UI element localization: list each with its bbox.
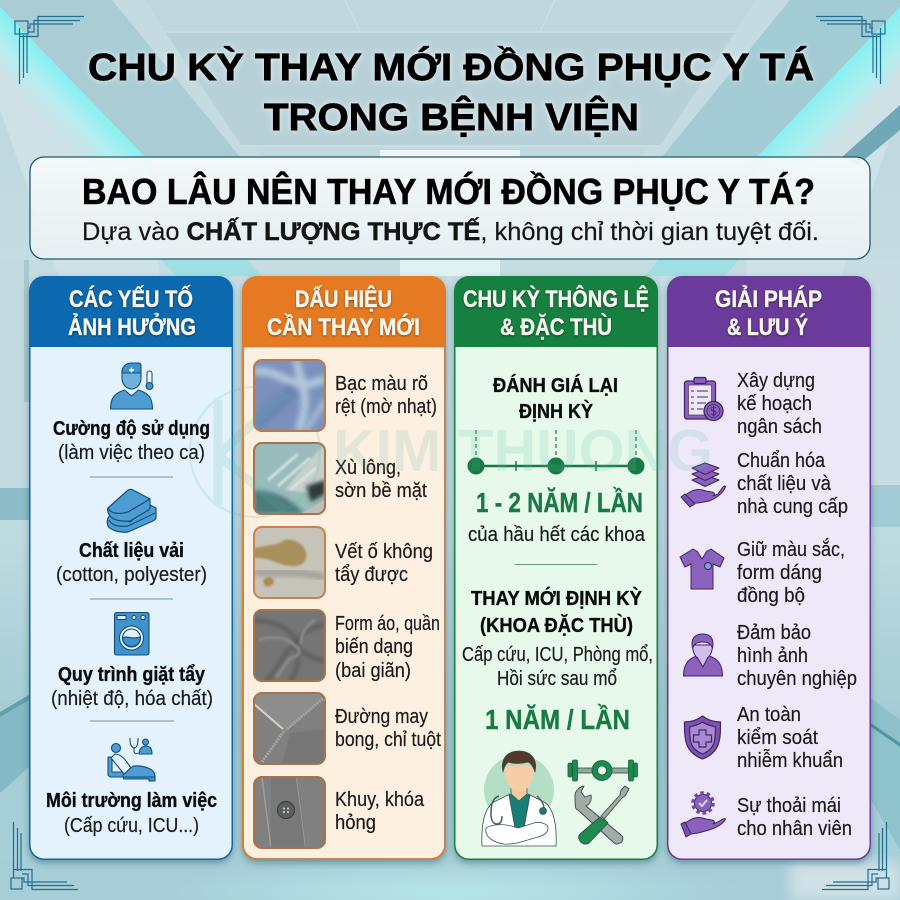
text: standardize bbox=[737, 450, 848, 518]
watermark: Kim Thuong logo: KIM THUONG bbox=[333, 418, 713, 484]
text: uniform consistency bbox=[737, 538, 845, 607]
text: usage intensity bbox=[53, 418, 210, 464]
text: buttons: hỏng bbox=[335, 812, 376, 834]
text: seams: bong, chỉ tuột bbox=[335, 729, 441, 751]
text: stains bbox=[335, 541, 433, 586]
text: uniform consistency: đồng bộ bbox=[737, 585, 805, 607]
title bbox=[88, 45, 814, 139]
panel heading: cycles: & ĐẶC THÙ bbox=[500, 313, 612, 341]
text: special departments: Cấp cứu, ICU, Phòng mổ, bbox=[462, 644, 653, 666]
text: seams bbox=[335, 706, 441, 751]
text: fabric material: Chất liệu vải bbox=[79, 540, 184, 562]
panel heading: factors bbox=[68, 285, 196, 341]
text: professional image: Đảm bảo bbox=[737, 622, 811, 644]
text: pilling: Xù lông, bbox=[335, 457, 401, 479]
photo: stained fabric bbox=[254, 527, 325, 598]
banner heading: BAO LÂU NÊN THAY MỚI ĐỒNG PHỤC Y TÁ? bbox=[82, 170, 815, 212]
text: stains: Vết ố không bbox=[335, 541, 433, 563]
text: standardize: nhà cung cấp bbox=[737, 496, 848, 518]
icon: scrub top bbox=[680, 549, 724, 589]
text: deformed shape bbox=[335, 613, 440, 682]
text: faded: rệt (mờ nhạt) bbox=[335, 396, 437, 418]
panel heading: cycles: CHU KỲ THÔNG LỆ bbox=[463, 285, 649, 313]
photo: faded fabric bbox=[254, 360, 325, 431]
text: uniform consistency: Giữ màu sắc, bbox=[737, 538, 845, 561]
icon: shield with cross bbox=[684, 716, 720, 759]
text: faded: Bạc màu rõ bbox=[335, 373, 428, 395]
text: stains: tẩy được bbox=[335, 564, 408, 586]
panel: factors bbox=[29, 276, 233, 860]
text: infection control: An toàn bbox=[737, 704, 801, 726]
watermark: Kim Thuong logo bbox=[190, 387, 713, 517]
text: pilling bbox=[335, 457, 427, 502]
heading: periodic replacement: THAY MỚI ĐỊNH KỲ bbox=[471, 586, 643, 610]
text: seams: Đường may bbox=[335, 706, 428, 728]
text: work environment bbox=[46, 790, 217, 837]
text: usage intensity: Cường độ sử dụng bbox=[53, 418, 210, 440]
text: professional image: chuyên nghiệp bbox=[737, 668, 857, 690]
icon: nurse with thermometer bbox=[110, 363, 153, 409]
text: work environment: (Cấp cứu, ICU...) bbox=[64, 815, 199, 837]
photo: broken button bbox=[254, 777, 325, 848]
text: deformed shape: (bai giãn) bbox=[335, 660, 411, 682]
stat: 1-2 years: 1 - 2 NĂM / LẦN bbox=[476, 487, 643, 518]
text: buttons: Khuy, khóa bbox=[335, 789, 425, 811]
text: staff comfort: Sự thoải mái bbox=[737, 795, 841, 817]
heading: periodic review: ĐÁNH GIÁ LẠI bbox=[493, 374, 618, 397]
text: budget plan: kế hoạch bbox=[737, 393, 812, 415]
text: pilling: sờn bề mặt bbox=[335, 480, 427, 502]
title: CHU KỲ THAY MỚI ĐỒNG PHỤC Y TÁ bbox=[88, 45, 814, 89]
panel heading: solutions: & LƯU Ý bbox=[727, 313, 808, 341]
text: budget plan: Xây dựng bbox=[737, 370, 815, 392]
panel heading: cycles bbox=[463, 285, 649, 341]
panel heading: signs: CẦN THAY MỚI bbox=[267, 313, 420, 341]
panel heading: solutions bbox=[715, 284, 822, 341]
panel: cycles bbox=[454, 276, 658, 860]
stat: 1 year: 1 NĂM / LẦN bbox=[485, 704, 630, 735]
icon: washing machine bbox=[114, 612, 149, 655]
question banner bbox=[30, 157, 870, 259]
icon: folded fabric bbox=[107, 489, 156, 532]
text: faded bbox=[335, 373, 437, 418]
photo: deformed fabric bbox=[254, 610, 325, 681]
icon: hand with gear check bbox=[681, 793, 725, 837]
icon: patient bed with stethoscope bbox=[108, 738, 155, 781]
panel: solutions bbox=[667, 276, 871, 860]
panel heading: solutions: GIẢI PHÁP bbox=[715, 284, 822, 313]
text: fabric material: (cotton, polyester) bbox=[56, 564, 207, 586]
text: work environment: Môi trường làm việc bbox=[46, 790, 217, 812]
illustration: doctor bbox=[482, 751, 556, 846]
text: most departments: của hầu hết các khoa bbox=[468, 524, 646, 546]
panel heading: factors: ẢNH HƯỞNG bbox=[68, 312, 196, 341]
text: infection control: nhiễm khuẩn bbox=[737, 749, 843, 772]
photo: pilling fabric bbox=[254, 443, 325, 514]
icon: wrench and screwdriver bbox=[575, 786, 629, 844]
text: laundry process: Quy trình giặt tẩy bbox=[58, 664, 206, 686]
text: deformed shape: biến dạng bbox=[335, 636, 413, 658]
text: staff comfort bbox=[737, 795, 852, 840]
heading: periodic replacement: (KHOA ĐẶC THÙ) bbox=[480, 613, 633, 637]
text: laundry process: (nhiệt độ, hóa chất) bbox=[51, 688, 213, 710]
heading: periodic replacement bbox=[471, 586, 643, 637]
text: budget plan: ngân sách bbox=[737, 416, 822, 438]
icon: medical professional bbox=[684, 634, 722, 676]
heading: periodic review: ĐỊNH KỲ bbox=[519, 399, 594, 423]
icon: budget clipboard bbox=[684, 378, 723, 420]
text: budget plan bbox=[737, 370, 822, 438]
text: professional image: hình ảnh bbox=[737, 645, 808, 667]
heading: periodic review bbox=[493, 374, 618, 423]
text: staff comfort: cho nhân viên bbox=[737, 818, 852, 840]
text: laundry process bbox=[51, 664, 213, 710]
timeline bbox=[468, 430, 644, 474]
text: buttons bbox=[335, 789, 425, 834]
text: special departments bbox=[462, 644, 653, 690]
text: uniform consistency: form dáng bbox=[737, 562, 822, 584]
panel heading: signs: DẤU HIỆU bbox=[295, 285, 392, 313]
text: professional image bbox=[737, 622, 857, 690]
text: infection control: kiểm soát bbox=[737, 727, 818, 749]
panel: signs bbox=[242, 276, 446, 860]
banner subtitle: Dựa vào CHẤT LƯỢNG THỰC TẾ, không chỉ thời gian tuyệt đối. bbox=[82, 217, 819, 246]
title: TRONG BỆNH VIỆN bbox=[264, 95, 639, 139]
text: deformed shape: Form áo, quần bbox=[335, 613, 440, 635]
panel heading: signs bbox=[267, 285, 420, 341]
text: infection control bbox=[737, 704, 843, 772]
text: usage intensity: (làm việc theo ca) bbox=[58, 442, 205, 464]
text: standardize: chất liệu và bbox=[737, 473, 832, 495]
text: special departments: Hồi sức sau mổ bbox=[497, 668, 617, 690]
text: standardize: Chuẩn hóa bbox=[737, 450, 826, 472]
icon: hand with fabric layers bbox=[681, 463, 725, 507]
photo: loose seams bbox=[254, 693, 325, 764]
panel heading: factors: CÁC YẾU TỐ bbox=[69, 285, 193, 313]
icon: dumbbell valve bbox=[568, 760, 638, 781]
text: fabric material bbox=[56, 540, 207, 586]
